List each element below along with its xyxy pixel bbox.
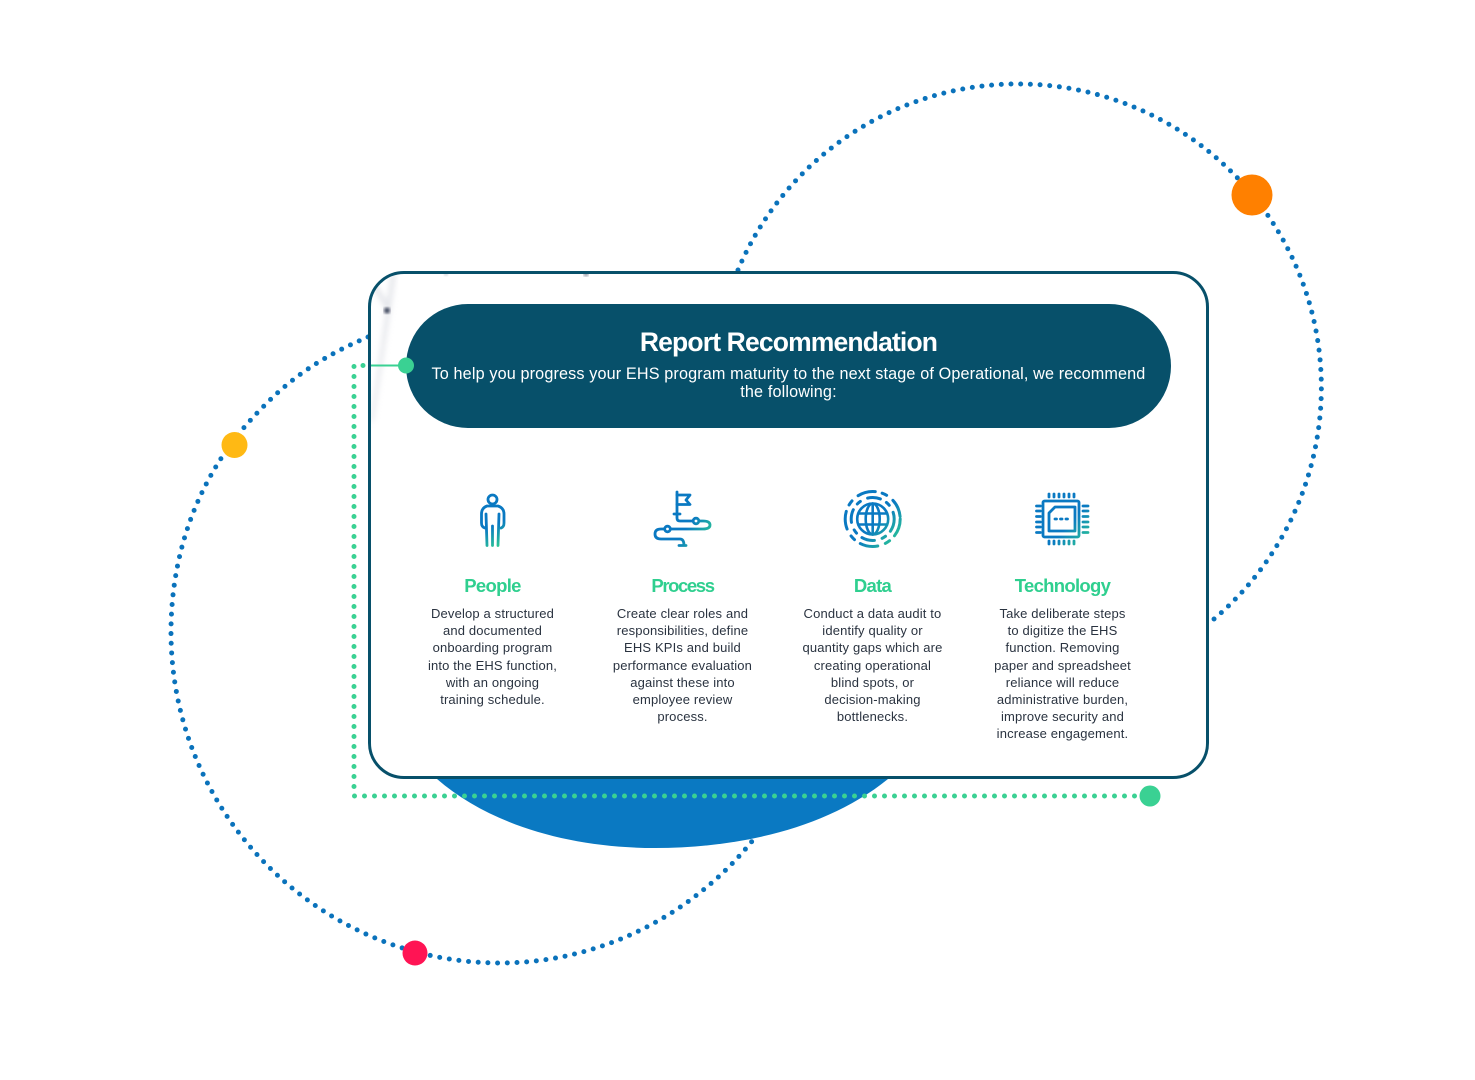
header banner xyxy=(406,304,1171,428)
icon: microchip xyxy=(1036,494,1088,544)
column: Technology: function. Removing xyxy=(1006,640,1119,655)
icon: person xyxy=(482,495,504,546)
dotted orbit: upper right xyxy=(738,84,1321,624)
column: Technology xyxy=(994,575,1131,741)
column: Data: bottlenecks. xyxy=(837,709,908,724)
column: People: and documented xyxy=(443,623,542,638)
column: Process: Create clear roles and xyxy=(617,606,748,621)
column: Technology: Take deliberate steps xyxy=(999,606,1126,621)
icon: flag and winding path xyxy=(655,492,710,546)
dotted green connector xyxy=(354,366,1150,796)
column: Data: Conduct a data audit to xyxy=(804,606,941,621)
dotted orbit: lower left xyxy=(171,337,757,963)
column: Process: against these into xyxy=(630,675,735,690)
column: People: onboarding program xyxy=(433,640,552,655)
banner subtitle: To help you progress your EHS program maturity to the next stage of Operational, we recommend the following: xyxy=(432,364,1145,401)
column: Process: performance evaluation xyxy=(613,658,752,673)
column: Data: Data xyxy=(854,575,891,596)
column: People: into the EHS function, xyxy=(428,658,557,673)
column: Technology: improve security and xyxy=(1001,709,1124,724)
column: Technology: Technology xyxy=(1015,575,1110,596)
blue circular segment behind the card xyxy=(437,770,888,848)
column: Data: identify quality or xyxy=(822,623,923,638)
column: Technology: paper and spreadsheet xyxy=(994,658,1131,673)
column: Data xyxy=(802,575,943,724)
column: Data: quantity gaps which are xyxy=(802,640,943,655)
column: People xyxy=(428,575,557,707)
banner title: Report Recommendation xyxy=(640,327,937,357)
column: People: Develop a structured xyxy=(431,606,554,621)
icon: globe with dashed rings xyxy=(845,492,900,546)
column: People: with an ongoing xyxy=(446,675,539,690)
column: Technology: to digitize the EHS xyxy=(1008,623,1117,638)
column: Process: process. xyxy=(657,709,708,724)
orange node xyxy=(1232,174,1272,216)
column: Technology: administrative burden, xyxy=(997,692,1128,707)
column: Technology: increase engagement. xyxy=(997,726,1128,741)
column: Process: responsibilities, define xyxy=(617,623,748,638)
column: Data: blind spots, or xyxy=(831,675,914,690)
column: Data: creating operational xyxy=(814,658,931,673)
column: Process xyxy=(613,575,752,724)
faint network texture xyxy=(371,274,589,418)
column: People: training schedule. xyxy=(440,692,545,707)
column: Process: employee review xyxy=(633,692,732,707)
column: People: People xyxy=(464,575,521,596)
green end node xyxy=(1140,786,1160,806)
report card panel xyxy=(368,271,1209,779)
column: Process: Process xyxy=(651,575,714,596)
column: Process: EHS KPIs and build xyxy=(624,640,741,655)
red node xyxy=(402,940,428,966)
column: Technology: reliance will reduce xyxy=(1006,675,1119,690)
column: Data: decision-making xyxy=(824,692,921,707)
yellow node xyxy=(222,432,248,458)
